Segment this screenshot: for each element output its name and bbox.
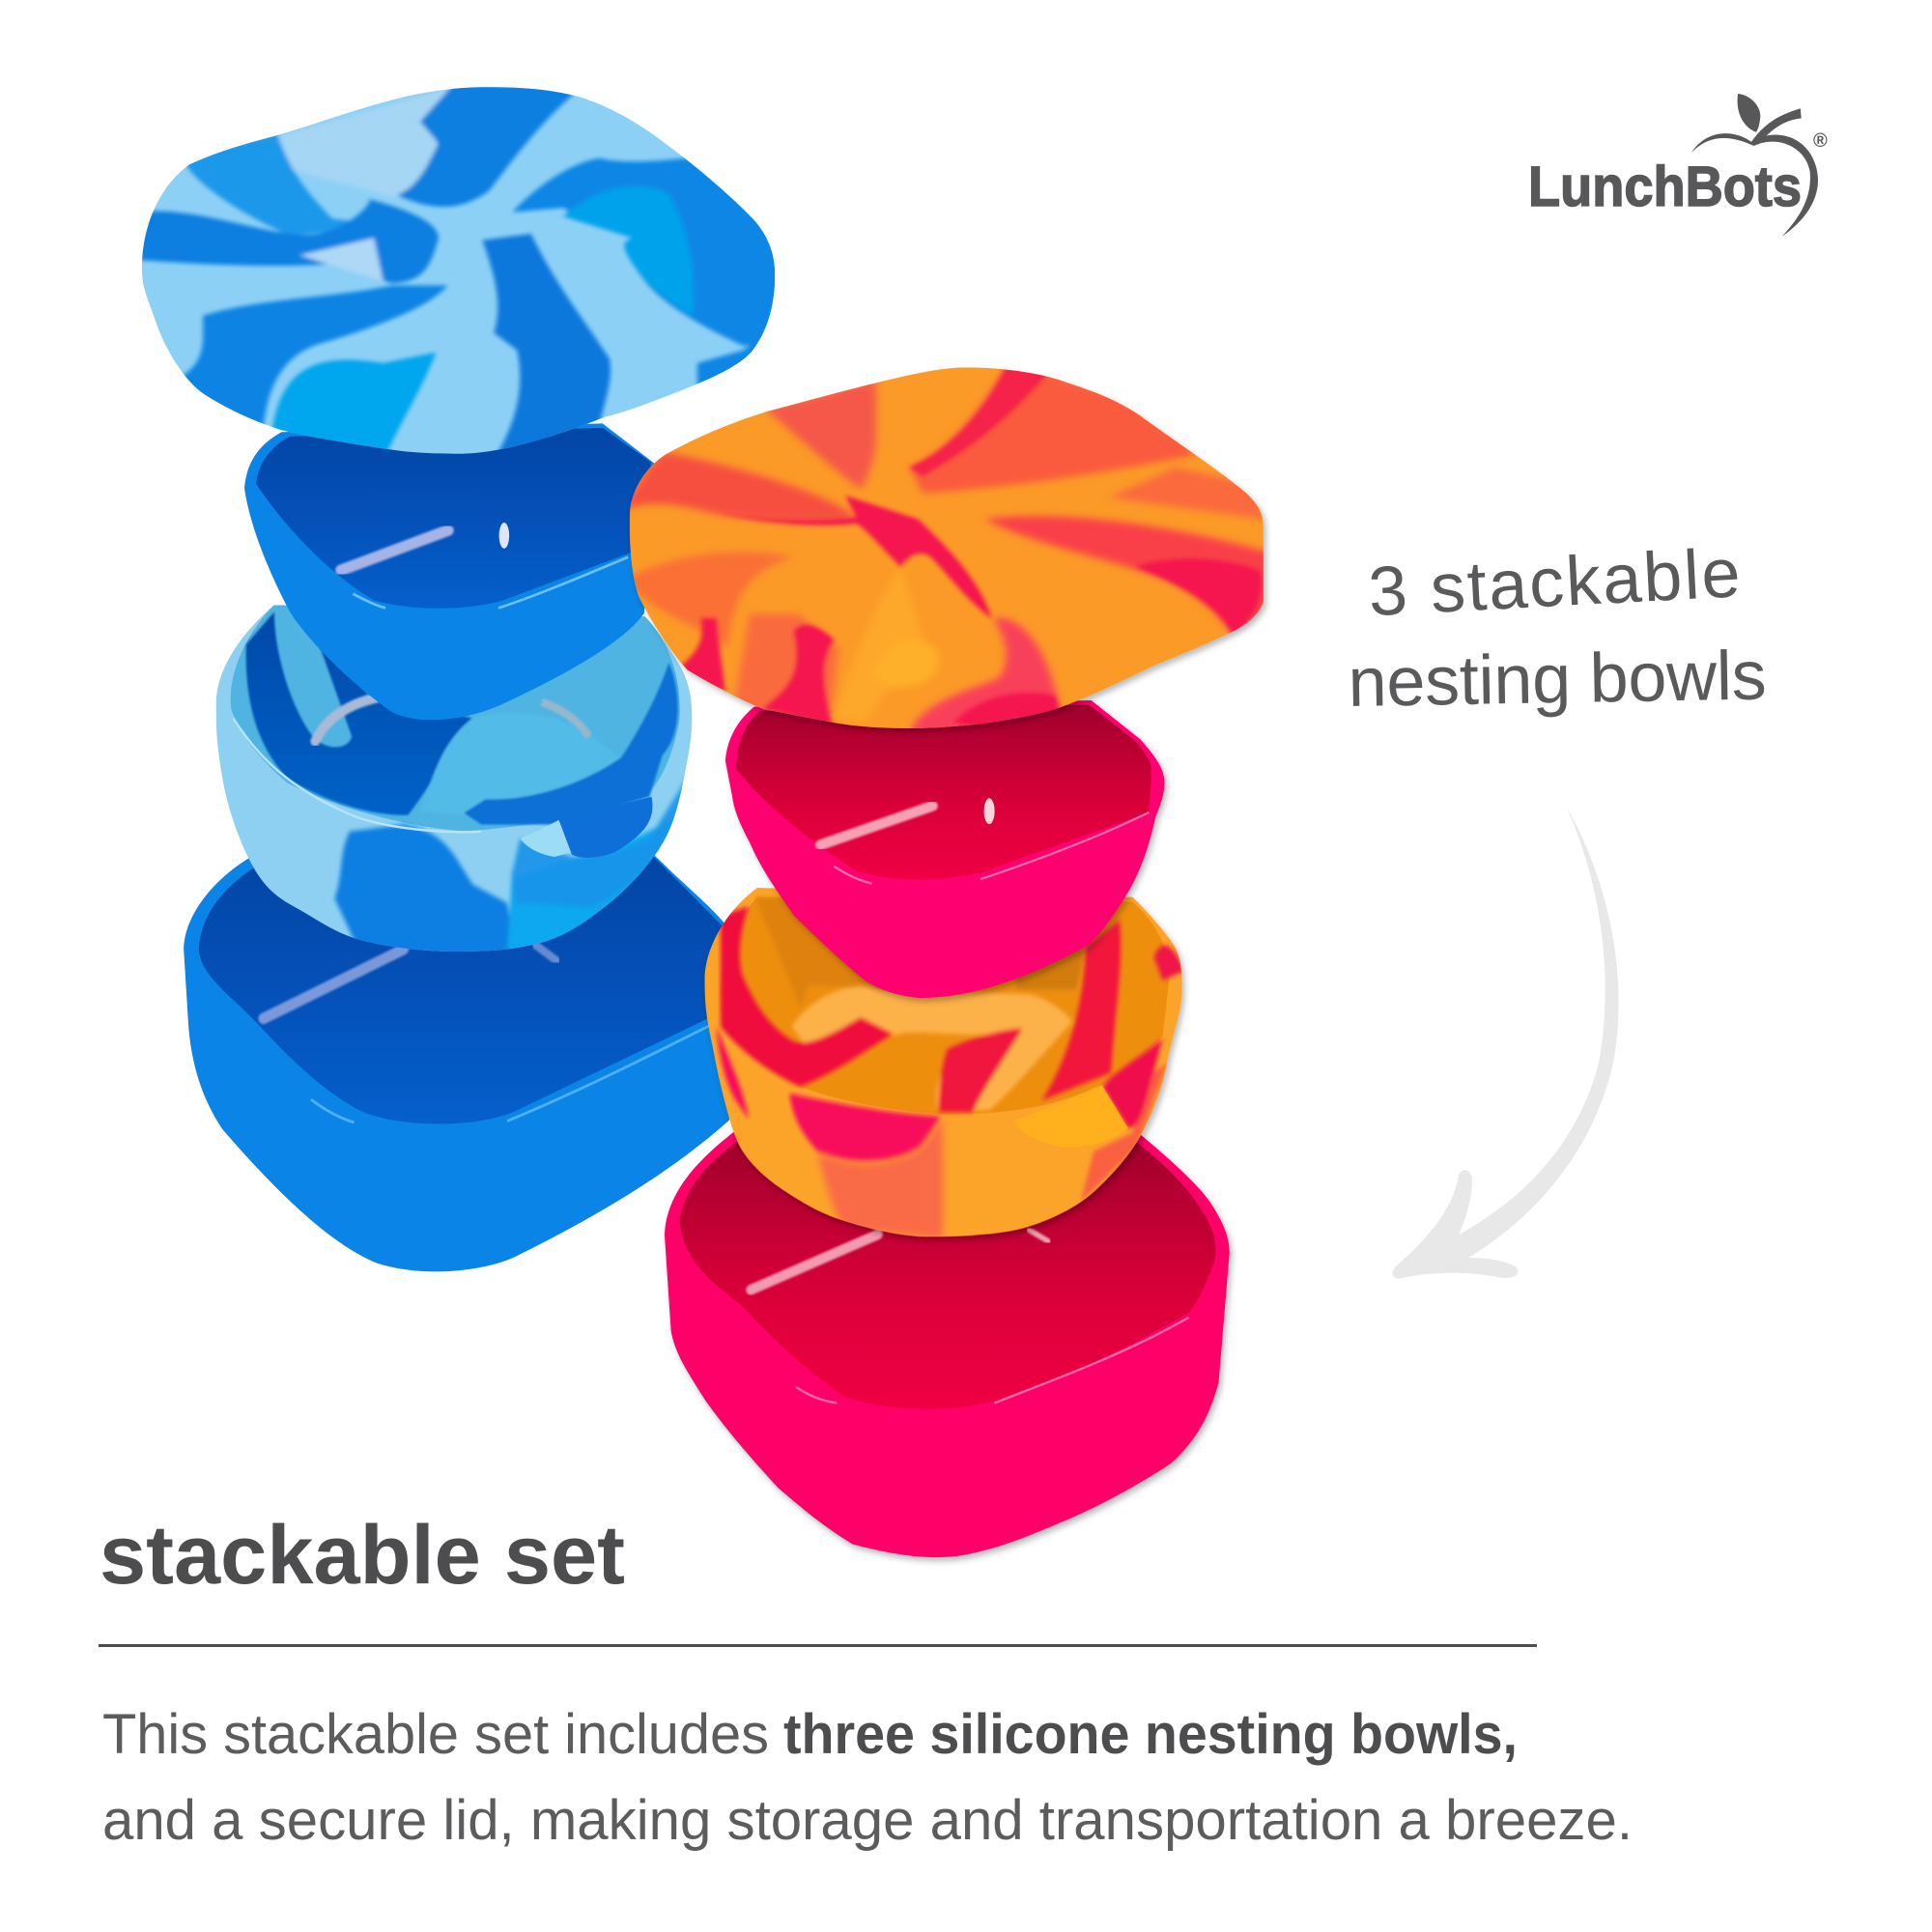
- divider rule: [99, 1644, 1537, 1647]
- registered mark: ®: [1813, 130, 1828, 152]
- orange marbled bowl: [693, 869, 1197, 1248]
- title: stackable set: [99, 1509, 625, 1602]
- small blue bowl: [244, 423, 656, 720]
- large blue bowl: [184, 855, 749, 1271]
- large pink bowl: [665, 1130, 1230, 1557]
- body text: three silicone nesting bowls,: [783, 1703, 1518, 1766]
- body text: and a secure lid, making storage and transportation a breeze.: [102, 1789, 1633, 1852]
- small pink bowl: [725, 700, 1164, 998]
- orange swirl lid: [621, 364, 1273, 735]
- logo: LunchBots: [1528, 94, 1828, 237]
- handwritten callout: nesting bowls: [1348, 637, 1767, 722]
- pink bowl stack: [621, 364, 1273, 1557]
- handwritten callout: [1348, 534, 1767, 722]
- body text: This stackable set includes: [102, 1703, 769, 1766]
- blue bowl stack: [133, 83, 789, 1271]
- handwritten callout: 3 stackable: [1367, 534, 1742, 631]
- arrow: curved grey arrow: [1393, 806, 1619, 1279]
- body text: [102, 1703, 1633, 1852]
- icon: apple outline and leaf: [1691, 94, 1818, 237]
- logo wordmark: LunchBots: [1528, 156, 1802, 218]
- blue marbled bowl: [216, 605, 692, 952]
- blue swirl lid: [133, 83, 789, 463]
